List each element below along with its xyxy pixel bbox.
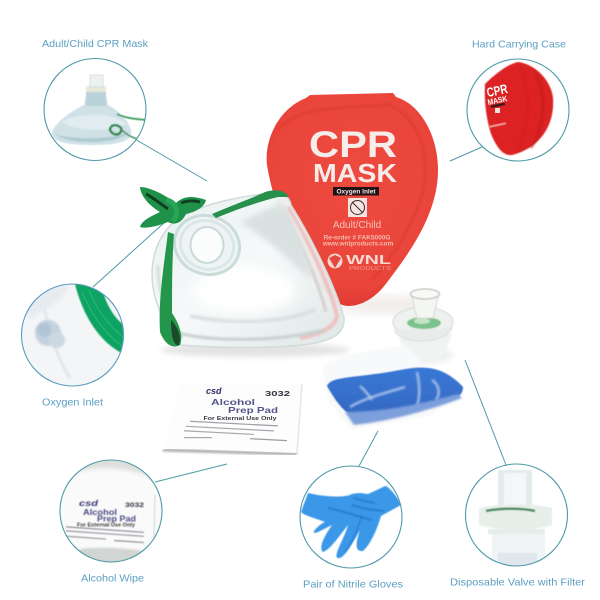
glove folds bbox=[350, 372, 439, 407]
connector: mask callout bbox=[136, 140, 207, 181]
label: Alcohol Wipe: Alcohol Wipe bbox=[81, 572, 144, 584]
mask shadow bbox=[160, 343, 350, 357]
mask inner tone bbox=[240, 203, 312, 280]
case text MASK: MASK bbox=[487, 94, 508, 107]
wipe number: 3032 bbox=[125, 502, 144, 509]
case text re-order: Re-order # FAK5000G bbox=[324, 234, 390, 242]
case title CPR: CPR bbox=[309, 124, 397, 165]
blue gloves bbox=[327, 368, 463, 416]
label: Adult/Child CPR Mask: Adult/Child CPR Mask bbox=[42, 38, 149, 50]
valve cone bbox=[398, 334, 452, 364]
mask left rim bbox=[158, 265, 182, 338]
mask port ring bbox=[166, 206, 248, 284]
connector: case callout bbox=[450, 147, 482, 161]
green strap bbox=[140, 187, 288, 346]
packet wrapper bbox=[322, 345, 468, 430]
valve shadow bbox=[397, 346, 453, 364]
panel: one-way valve bbox=[393, 289, 453, 364]
case shadow bbox=[335, 297, 435, 313]
connector: alcohol wipe callout bbox=[155, 464, 227, 482]
mask right rim bbox=[288, 207, 337, 338]
callout: alcohol wipe closeup bbox=[58, 455, 164, 566]
pad brand: csd bbox=[206, 386, 222, 396]
callout: hard case side view bbox=[467, 59, 569, 161]
logo: WNL Products: WNL bbox=[346, 252, 391, 267]
label: Oxygen Inlet: Oxygen Inlet bbox=[42, 396, 103, 408]
no-latex icon bbox=[348, 198, 367, 217]
wipe title second line: Prep Pad bbox=[97, 514, 136, 524]
pad title second line: Prep Pad bbox=[228, 405, 278, 415]
mask outer shell bbox=[152, 193, 344, 348]
packet lower plastic bbox=[345, 394, 462, 425]
wipe title: Alcohol bbox=[83, 508, 117, 517]
mask dome highlight bbox=[193, 266, 297, 314]
case text CPR: CPR bbox=[485, 81, 509, 100]
panel: alcohol prep pad bbox=[163, 382, 302, 454]
pad shadow bbox=[163, 450, 297, 454]
case text adult/child: Adult/Child bbox=[333, 220, 381, 231]
wipe brand: csd bbox=[79, 499, 100, 508]
connector: valve callout bbox=[465, 360, 506, 465]
callout: nitrile gloves bbox=[300, 466, 402, 568]
logo: WNL Products bbox=[328, 252, 391, 272]
oxygen inlet tag bbox=[333, 187, 379, 196]
case text website: www.wnlproducts.com bbox=[322, 240, 393, 248]
wipe note: For External Use Only bbox=[77, 522, 135, 528]
pad title: Alcohol bbox=[211, 397, 255, 407]
panel: red hard case bbox=[267, 93, 438, 306]
mask lower rim bbox=[178, 330, 325, 339]
callout: oxygen inlet closeup bbox=[20, 280, 128, 387]
label: Pair of Nitrile Gloves: Pair of Nitrile Gloves bbox=[303, 578, 403, 590]
label: Disposable Valve with Filter: Disposable Valve with Filter bbox=[450, 576, 586, 588]
pad sheet bbox=[164, 382, 302, 453]
callout: valve closeup bbox=[466, 464, 568, 572]
valve filter bbox=[407, 317, 441, 329]
pad number: 3032 bbox=[265, 391, 290, 398]
connector: oxygen inlet callout bbox=[93, 222, 165, 287]
panel: clear CPR mask bbox=[140, 187, 344, 348]
callout: mask side view bbox=[44, 58, 146, 160]
valve tube bbox=[411, 293, 439, 318]
case body bbox=[267, 93, 438, 306]
logo: WNL Products: PRODUCTS bbox=[349, 266, 391, 272]
panel: gloves packet bbox=[322, 345, 468, 430]
connector: gloves callout bbox=[359, 431, 378, 466]
valve disc bbox=[393, 307, 453, 337]
oxygen inlet tag: Oxygen Inlet bbox=[336, 188, 376, 196]
label: Hard Carrying Case: Hard Carrying Case bbox=[472, 38, 566, 50]
case title MASK: MASK bbox=[313, 158, 397, 188]
pad note: For External Use Only bbox=[204, 416, 277, 422]
